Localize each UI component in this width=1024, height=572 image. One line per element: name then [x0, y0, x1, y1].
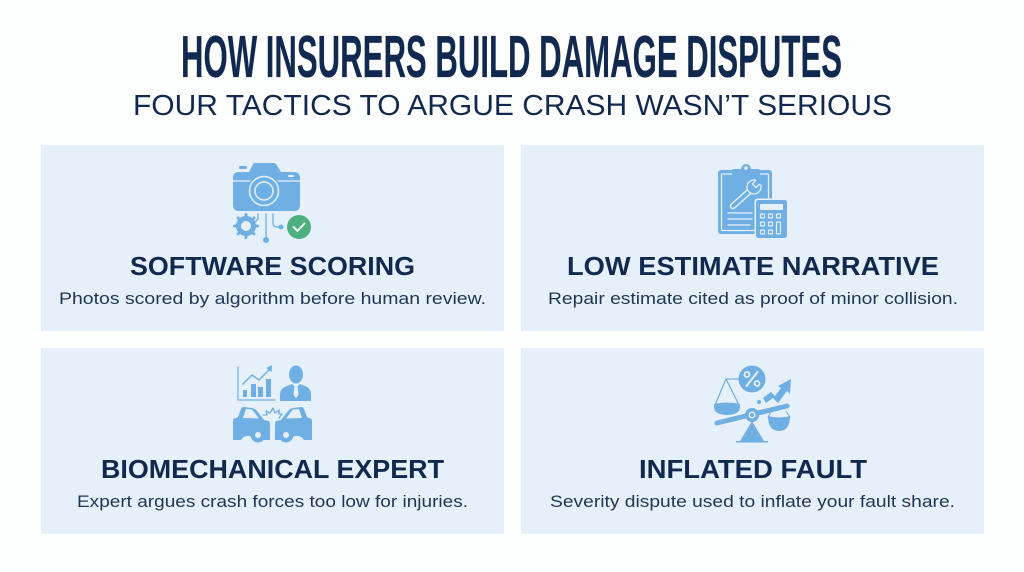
description: Repair estimate cited as proof of minor collision.: [548, 289, 958, 308]
heading: BIOMECHANICAL EXPERT: [101, 456, 444, 484]
description: Photos scored by algorithm before human review.: [59, 289, 486, 308]
description: Severity dispute used to inflate your fault share.: [550, 492, 955, 511]
heading: LOW ESTIMATE NARRATIVE: [567, 253, 939, 281]
icon: clipboard and calculator: [718, 164, 788, 239]
subtitle: FOUR TACTICS TO ARGUE CRASH WASN’T SERIOUS: [133, 90, 892, 122]
heading: INFLATED FAULT: [639, 456, 867, 484]
icon: chart, expert and colliding cars: [233, 365, 312, 442]
wrench: [733, 179, 762, 206]
heading: SOFTWARE SCORING: [130, 253, 415, 281]
description: Expert argues crash forces too low for injuries.: [77, 492, 468, 511]
panel: low estimate narrative: [521, 145, 984, 331]
icon: scales, percent and rising arrow: [714, 366, 791, 442]
panel: inflated fault: [521, 348, 984, 534]
panel: software scoring: [41, 145, 504, 331]
icon: camera with gear and check: [233, 163, 311, 243]
panel: biomechanical expert: [41, 348, 504, 534]
